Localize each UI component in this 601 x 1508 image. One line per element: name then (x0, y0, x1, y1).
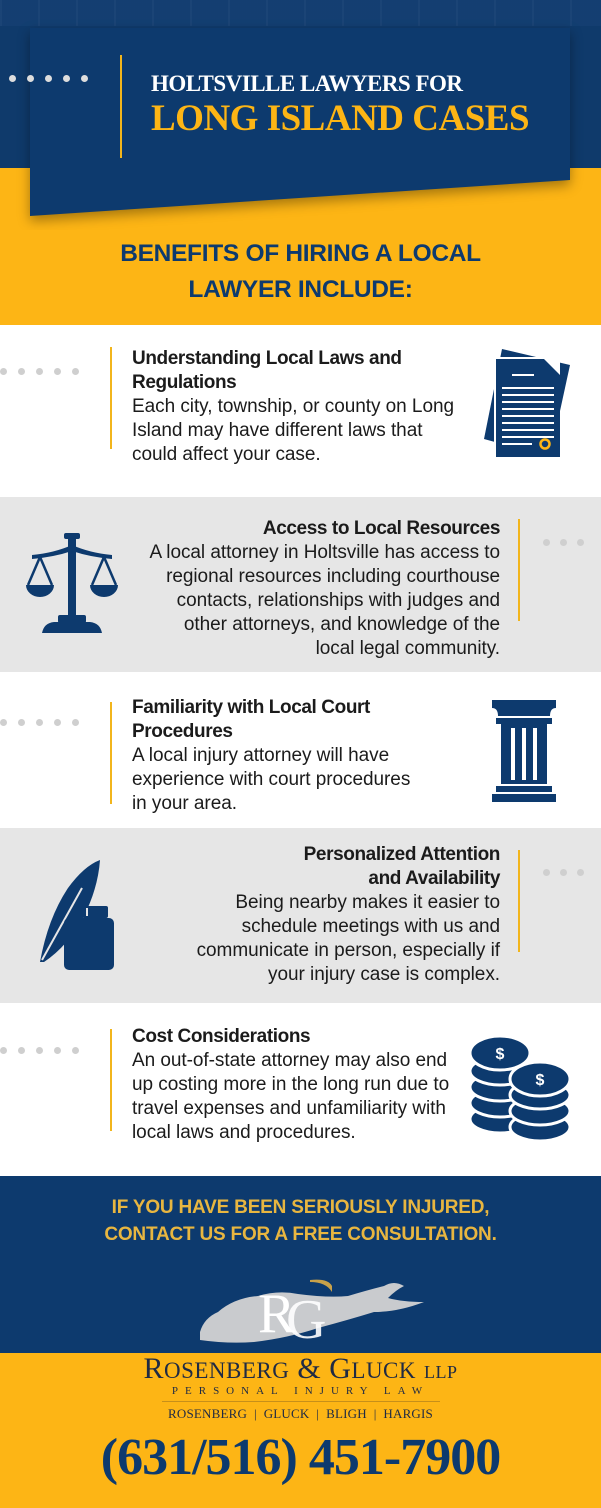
panel: personalized attention: your injury case is complex. (268, 964, 500, 985)
footer navy (0, 1176, 601, 1353)
subheading: LAWYER INCLUDE: (188, 276, 413, 303)
icon: coins (472, 1038, 568, 1140)
header background (0, 0, 601, 168)
call to action: IF YOU HAVE BEEN SERIOUSLY INJURED, (112, 1197, 489, 1218)
icon: quill and ink (40, 860, 114, 970)
icon: coins: $ (496, 1046, 505, 1063)
icon: column (492, 700, 556, 802)
title panel (9, 32, 578, 228)
title text: HOLTSVILLE LAWYERS FOR (151, 71, 463, 96)
panel: personalized attention (0, 828, 601, 1003)
footer yellow (0, 1353, 601, 1508)
panel: local resources: contacts, relationships with judges and (177, 590, 500, 611)
subheading: BENEFITS OF HIRING A LOCAL (120, 240, 481, 267)
panel: court procedures: Familiarity with Local Court (132, 697, 370, 718)
panel: cost considerations: up costing more in the long run due to (132, 1074, 449, 1095)
panel: personalized attention: Being nearby makes it easier to (235, 892, 500, 913)
panel: local laws (0, 325, 601, 497)
icon: document (484, 349, 570, 457)
panel: local resources: Access to Local Resources (263, 518, 500, 539)
panel: court procedures: experience with court procedures (132, 769, 410, 790)
panel: personalized attention: communicate in person, especially if (197, 940, 500, 961)
panel: cost considerations: local laws and procedures. (132, 1122, 356, 1143)
panel: cost considerations: travel expenses and unfamiliarity with (132, 1098, 446, 1119)
title panel: LONG ISLAND CASES (151, 98, 529, 139)
phone number: (631/516) 451-7900 (101, 1429, 500, 1486)
icon: coins: $ (536, 1072, 545, 1089)
panel: cost considerations: Cost Considerations (132, 1026, 310, 1047)
panel: personalized attention: and Availability (368, 868, 500, 889)
call to action (104, 1197, 497, 1245)
panel: local resources: regional resources including courthouse (166, 566, 500, 587)
panel: court procedures (0, 672, 601, 828)
footer yellow: PERSONAL INJURY LAW (172, 1385, 429, 1397)
panel: cost considerations (0, 1003, 601, 1176)
panel: local laws: Each city, township, or county on Long (132, 396, 454, 417)
panel: local laws: Island may have different laws that (132, 420, 422, 441)
subheading (120, 240, 481, 303)
panel: court procedures: A local injury attorney will have (132, 745, 389, 766)
call to action: CONTACT US FOR A FREE CONSULTATION. (104, 1224, 497, 1245)
panel: local laws: could affect your case. (132, 444, 321, 465)
logo: long island map (200, 1280, 424, 1346)
logo: long island map: R (258, 1283, 296, 1345)
panel: court procedures: in your area. (132, 793, 237, 814)
panel: local resources: other attorneys, and knowledge of the (184, 614, 500, 635)
panel: local laws: Regulations (132, 372, 236, 393)
panel: personalized attention: Personalized Attention (304, 844, 500, 865)
icon: scales (26, 533, 118, 633)
footer yellow: ROSENBERG | GLUCK | BLIGH | HARGIS (168, 1406, 433, 1421)
panel: local laws: Understanding Local Laws and (132, 348, 402, 369)
header pattern (0, 0, 601, 26)
panel: court procedures: Procedures (132, 721, 233, 742)
panel: cost considerations: An out-of-state attorney may also end (132, 1050, 447, 1071)
panel: local resources: local legal community. (316, 638, 500, 659)
panel: local resources (0, 497, 601, 672)
panel: local resources: A local attorney in Holtsville has access to (149, 542, 500, 563)
firm name: ROSENBERG & GLUCK LLP (143, 1352, 458, 1385)
panel: personalized attention: schedule meetings with us and (242, 916, 500, 937)
